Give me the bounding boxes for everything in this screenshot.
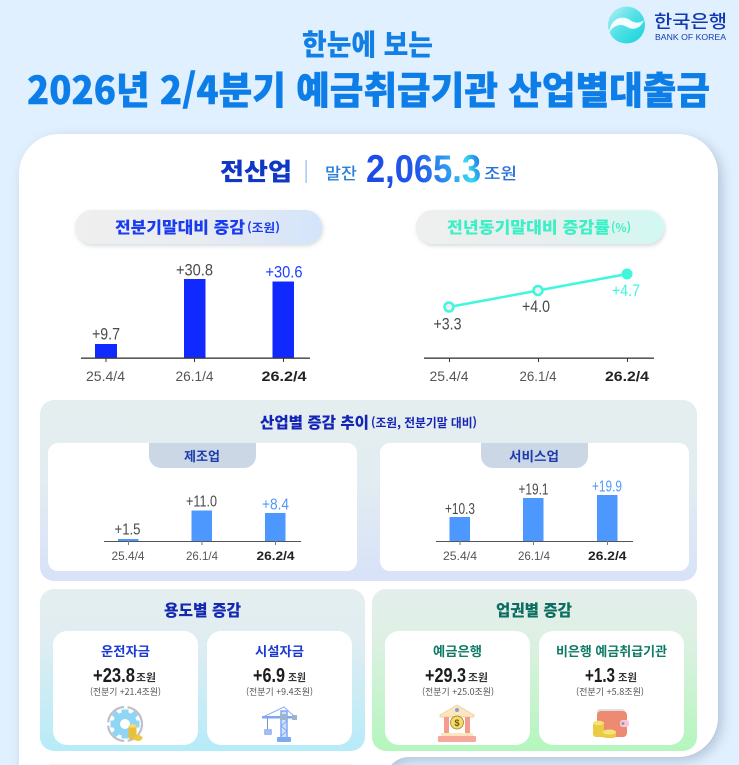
card: non-bank deposit institutions: (전분기 +5.8조원) <box>576 685 644 698</box>
line <box>449 274 627 307</box>
card: working capital <box>53 631 198 745</box>
sub-panel: services: +19.1 <box>518 482 549 498</box>
sub-panel: manufacturing: +11.0 <box>186 494 217 510</box>
heading pill: year-on-year growth rate: (%) <box>611 219 631 236</box>
panel: change by institution type <box>372 589 697 751</box>
sub-panel: services: 26.2/4 <box>588 549 627 563</box>
category labels: 25.4/4 <box>430 369 469 384</box>
heading: change trend by industry <box>260 411 477 433</box>
sub-panel: manufacturing <box>48 443 357 571</box>
card: deposit banks: 조원 <box>468 670 488 685</box>
axis <box>81 358 310 362</box>
icon: bank building <box>438 705 476 742</box>
card: non-bank deposit institutions: 조원 <box>618 670 637 685</box>
sub-panel: manufacturing: 26.1/4 <box>186 549 218 563</box>
heading pill: change from previous quarter: 전분기말대비 증감 <box>115 214 245 238</box>
panel: all-industry balance header <box>220 148 517 191</box>
sub-panel: manufacturing: 26.2/4 <box>256 549 295 563</box>
logo: Bank of Korea: BANK OF KOREA <box>655 32 726 42</box>
card: working capital: 조원 <box>136 670 156 685</box>
sub-panel: manufacturing: +1.5 <box>114 522 141 538</box>
icon: tower crane <box>262 707 297 742</box>
value labels: +30.6 <box>266 264 302 282</box>
card: working capital: +23.8 <box>93 664 135 687</box>
card: working capital: 운전자금 <box>101 641 150 660</box>
data points <box>444 268 632 312</box>
card: deposit banks <box>385 631 530 745</box>
panel: change by purpose <box>40 589 365 751</box>
sub-panel: services: +10.3 <box>445 501 475 518</box>
sub-panel: services: 25.4/4 <box>443 549 477 563</box>
panel: year-on-year growth line chart <box>416 210 664 384</box>
panel: all-industry balance header: 2,065.3 <box>366 148 481 191</box>
heading: by institution type: 업권별 증감 <box>496 597 572 621</box>
icon: bank building: $ <box>454 718 460 728</box>
panel: all-industry balance header: 전산업 <box>220 152 292 187</box>
logo: Bank of Korea <box>608 6 727 44</box>
value labels: +9.7 <box>92 326 120 344</box>
card: working capital: (전분기 +21.4조원) <box>90 685 161 698</box>
heading: by purpose: 용도별 증감 <box>164 597 241 621</box>
heading pill: year-on-year growth rate: 전년동기말대비 증감률 <box>447 214 610 238</box>
heading: change trend by industry: (조원, 전분기말 대비) <box>371 414 477 431</box>
heading pill: year-on-year growth rate <box>416 210 664 244</box>
sub-panel: services: +19.9 <box>592 478 622 496</box>
panel: all-industry balance header: 말잔 <box>325 160 357 184</box>
panel: change by industry <box>40 400 697 581</box>
value labels: +30.8 <box>176 262 213 280</box>
heading: main title: 2026년 2/4분기 예금취급기관 산업별대출금 <box>27 60 710 115</box>
card: facility capital <box>207 631 352 745</box>
sub-panel: manufacturing: 제조업 <box>184 446 220 465</box>
card: non-bank deposit institutions: 비은행 예금취급기관 <box>556 641 667 660</box>
category labels: 26.1/4 <box>520 369 557 384</box>
card: deposit banks: (전분기 +25.0조원) <box>422 685 494 698</box>
heading: change trend by industry: 산업별 증감 추이 <box>260 411 369 433</box>
value labels <box>434 282 640 334</box>
bars <box>95 279 294 358</box>
heading: subtitle: 한눈에 보는 <box>302 22 433 64</box>
value labels <box>92 262 302 344</box>
card: facility capital: 조원 <box>288 670 306 685</box>
icon: wallet with coins <box>593 709 629 738</box>
panel: all-industry balance header: 조원 <box>484 160 517 184</box>
sub-panel: services <box>380 443 689 571</box>
value labels: +3.3 <box>434 316 462 334</box>
sub-panel: manufacturing: +8.4 <box>262 496 289 514</box>
category labels: 26.1/4 <box>176 369 214 384</box>
card: facility capital: 시설자금 <box>255 641 304 660</box>
icon: gear with coins <box>108 707 142 741</box>
value labels: +4.7 <box>612 282 640 300</box>
category labels: 26.2/4 <box>605 369 650 384</box>
heading pill: change from previous quarter: (조원) <box>247 219 280 236</box>
sub-panel: services: 26.1/4 <box>518 549 550 563</box>
card: facility capital: (전분기 +9.4조원) <box>246 685 313 698</box>
value labels: +4.0 <box>522 298 550 316</box>
next panel top edge (cropped) <box>50 764 353 765</box>
sub-panel: services: 서비스업 <box>509 446 559 465</box>
category labels: 25.4/4 <box>86 369 125 384</box>
category labels <box>86 369 307 384</box>
card: non-bank deposit institutions: +1.3 <box>585 664 615 687</box>
panel: quarter-on-quarter change bar chart <box>75 210 322 384</box>
logo: Bank of Korea: 한국은행 <box>654 8 727 34</box>
axis <box>424 358 654 362</box>
heading pill: change from previous quarter <box>75 210 322 244</box>
card: deposit banks: 예금은행 <box>433 641 482 660</box>
category labels: 26.2/4 <box>262 369 307 384</box>
category labels <box>430 369 650 384</box>
card: deposit banks: +29.3 <box>425 664 466 687</box>
card: facility capital: +6.9 <box>253 664 285 687</box>
card: non-bank deposit institutions <box>539 631 684 745</box>
sub-panel: manufacturing: 25.4/4 <box>112 549 145 563</box>
white main card <box>19 134 718 765</box>
